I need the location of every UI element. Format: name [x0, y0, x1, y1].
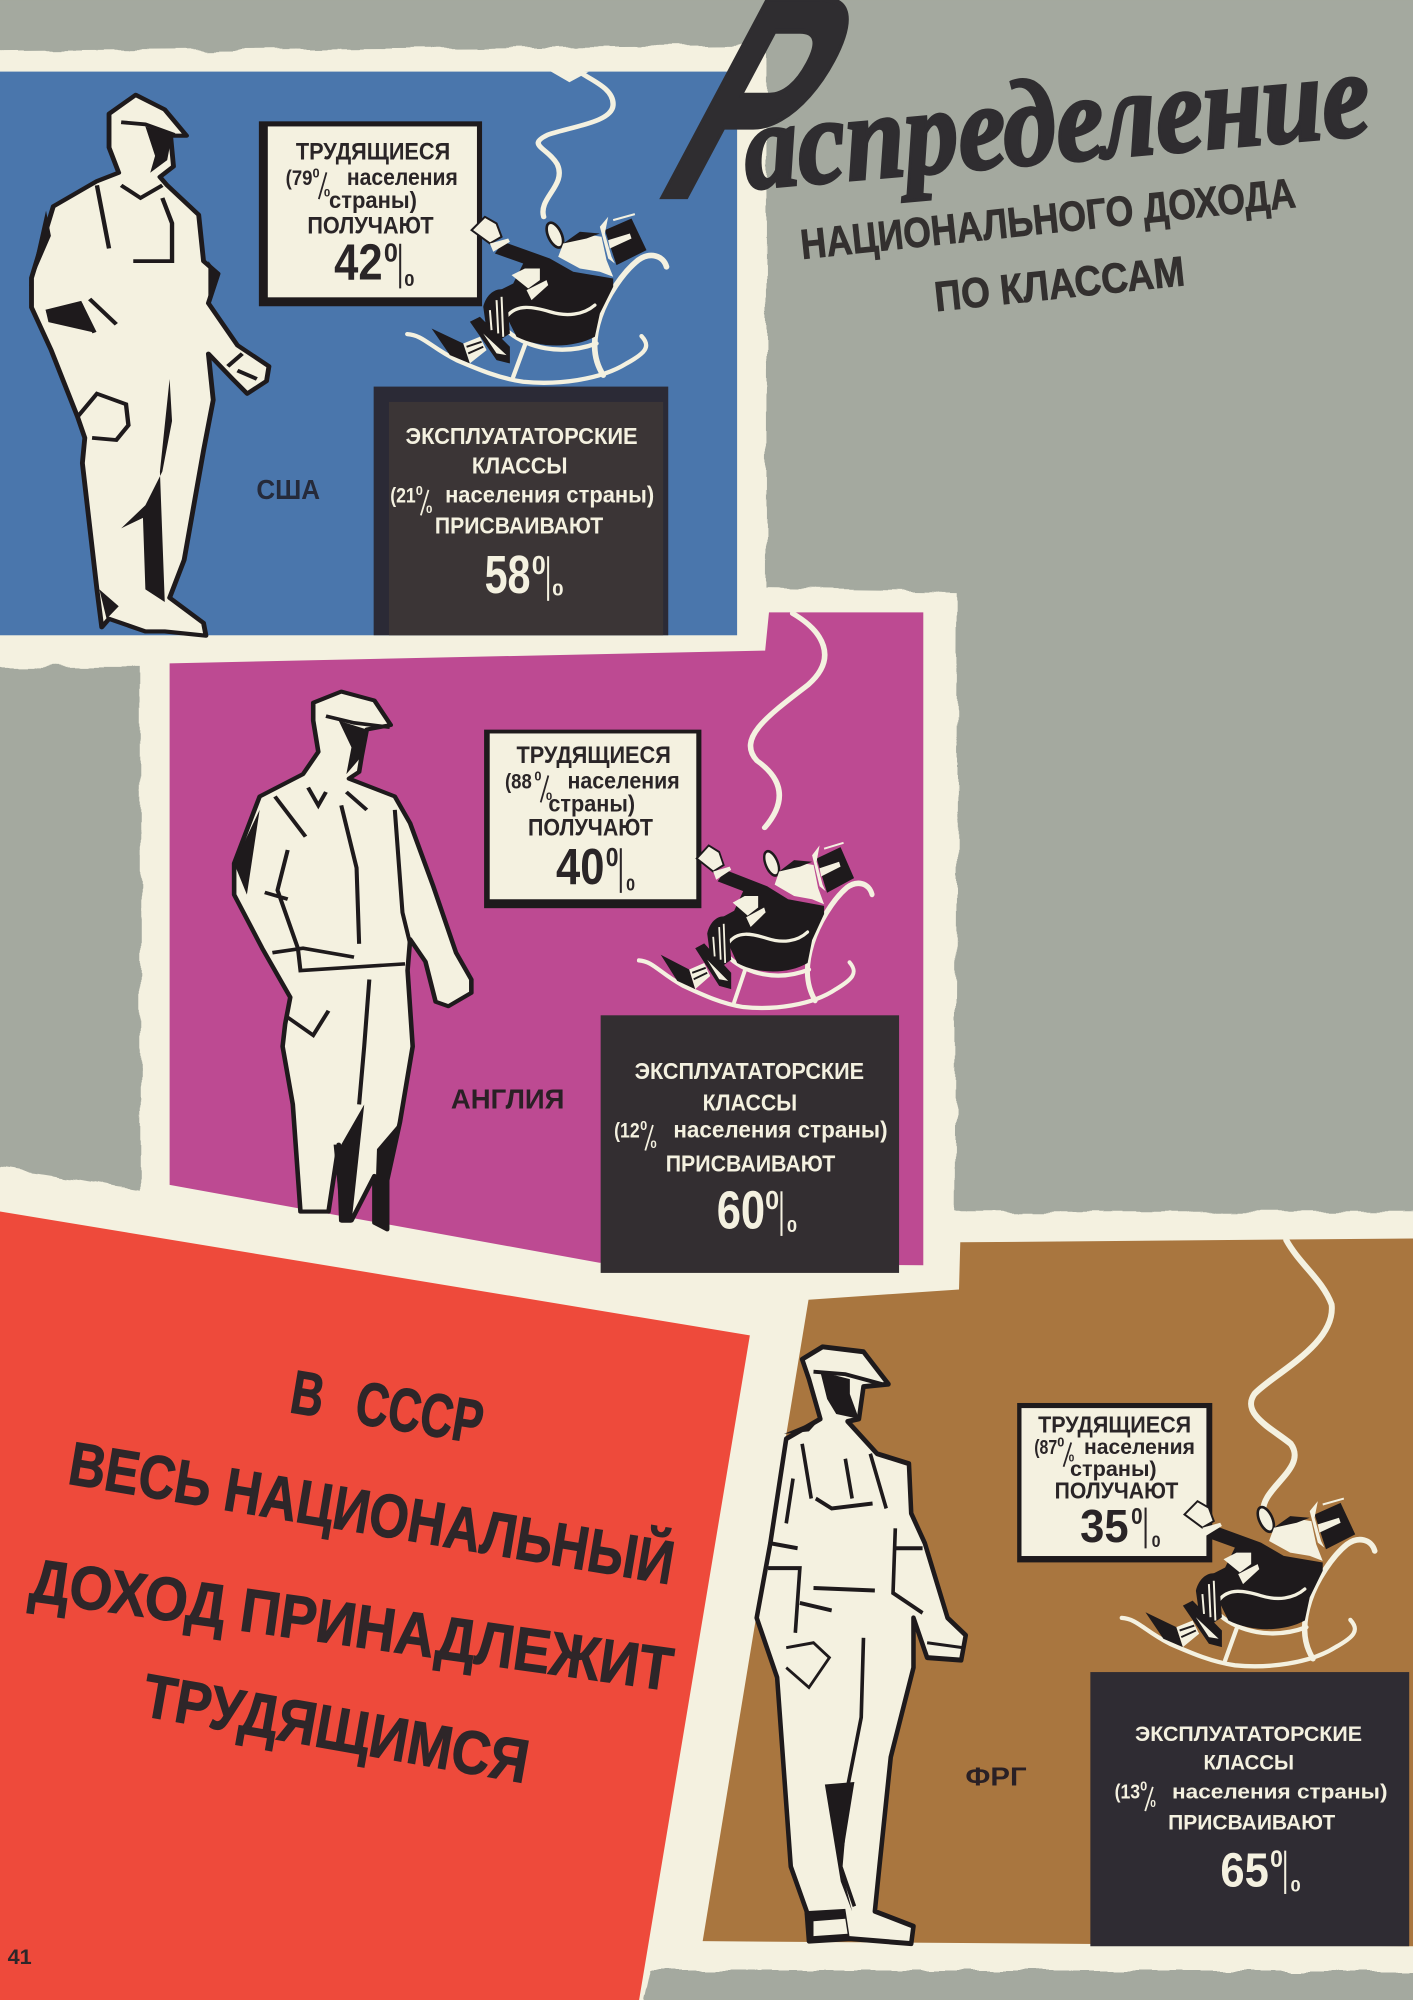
worker figure USA — [29, 95, 269, 636]
title: Распределение — [618, 0, 1375, 257]
sign: working people England: 0 — [606, 844, 619, 872]
country label England: АНГЛИЯ — [451, 1083, 564, 1114]
panel: USA — [0, 70, 737, 636]
sign: working people England: (88 — [505, 768, 532, 793]
black box: exploiters England: ПРИСВАИВАЮТ — [666, 1150, 835, 1176]
red background — [0, 1210, 750, 2000]
sign: working people FRG: (87 — [1034, 1437, 1057, 1459]
black box: exploiters USA: (21 — [390, 483, 416, 508]
blue background — [0, 72, 737, 635]
black box: exploiters FRG: КЛАССЫ — [1203, 1750, 1294, 1775]
statement text: ТРУДЯЩИМСЯ — [138, 1661, 534, 1796]
worker figure FRG — [757, 1347, 966, 1944]
black box: exploiters USA: ПРИСВАИВАЮТ — [435, 512, 603, 538]
black box: exploiters USA: населения страны) — [445, 482, 654, 508]
black box: exploiters USA: 0 — [426, 504, 432, 516]
sign: working people England: населения — [567, 767, 680, 793]
sign: working people FRG: 35 — [1080, 1500, 1129, 1552]
subtitle: ПО КЛАССАМ — [932, 247, 1187, 320]
black box: exploiters FRG: 0 — [1291, 1876, 1301, 1895]
black box: exploiters England: КЛАССЫ — [703, 1089, 797, 1115]
black box: exploiters FRG: населения страны) — [1172, 1781, 1387, 1803]
black box: exploiters USA: 0 — [416, 483, 423, 498]
smoke USA — [538, 70, 613, 217]
panel: FRG — [703, 1238, 1413, 1946]
sign: working people FRG: 0 — [1069, 1454, 1075, 1465]
sign: working people England: ПОЛУЧАЮТ — [528, 814, 653, 841]
pink background — [170, 612, 923, 1265]
sign: working people England — [484, 730, 701, 908]
sign: working people England: страны) — [548, 790, 635, 816]
worker figure England — [234, 692, 471, 1229]
sign: working people FRG: страны) — [1070, 1456, 1157, 1481]
black box: exploiters England: (12 — [614, 1118, 640, 1143]
page number: 41 — [8, 1944, 32, 1969]
subtitle: НАЦИОНАЛЬНОГО ДОХОДА — [798, 169, 1298, 268]
sign: working people USA: 42 — [334, 233, 383, 290]
sign: working people USA — [259, 121, 482, 306]
sign: working people England: ТРУДЯЩИЕСЯ — [516, 742, 671, 769]
black box: exploiters England: 0 — [650, 1139, 657, 1151]
panel: England — [170, 612, 923, 1273]
sign: working people FRG: 0 — [1057, 1434, 1064, 1449]
sign: working people USA: ПОЛУЧАЮТ — [307, 213, 434, 240]
black box: exploiters FRG: 0 — [1270, 1846, 1283, 1873]
sign: working people FRG: ПОЛУЧАЮТ — [1055, 1478, 1178, 1504]
sign: working people England: 0 — [546, 791, 552, 803]
sign: working people USA: населения — [347, 164, 458, 190]
black box: exploiters England: населения страны) — [673, 1117, 888, 1143]
black box: exploiters FRG: ПРИСВАИВАЮТ — [1168, 1810, 1335, 1835]
black box: exploiters England — [601, 1015, 899, 1273]
black box: exploiters England: 0 — [640, 1118, 647, 1133]
sign: working people USA: ТРУДЯЩИЕСЯ — [296, 139, 450, 166]
country label USA: США — [256, 474, 320, 505]
sign: working people England: 0 — [534, 769, 541, 784]
statement text: ДОХОД ПРИНАДЛЕЖИТ — [26, 1546, 677, 1704]
black box: exploiters USA: КЛАССЫ — [472, 452, 567, 478]
sign: working people FRG: ТРУДЯЩИЕСЯ — [1038, 1411, 1191, 1437]
capitalist in rocking chair USA — [407, 214, 667, 383]
capitalist in rocking chair FRG — [1122, 1499, 1375, 1666]
black box: exploiters FRG — [1090, 1672, 1409, 1946]
sign: working people FRG: 0 — [1152, 1532, 1160, 1551]
subtitle — [798, 169, 1298, 320]
black box: exploiters USA: ЭКСПЛУАТАТОРСКИЕ — [406, 423, 638, 449]
sign: working people England: 40 — [556, 838, 604, 895]
panel: USSR red statement — [0, 1210, 750, 2000]
black box: exploiters England: ЭКСПЛУАТАТОРСКИЕ — [635, 1058, 864, 1084]
black box: exploiters USA — [374, 387, 668, 635]
black box: exploiters USA: 58 — [485, 546, 531, 605]
black box: exploiters FRG: 0 — [1140, 1779, 1147, 1794]
black box: exploiters FRG: 0 — [1150, 1799, 1156, 1810]
black box: exploiters England: 60 — [717, 1181, 765, 1240]
statement text — [26, 1358, 679, 1796]
sign: working people USA: 0 — [404, 270, 415, 290]
black box: exploiters England: 0 — [765, 1187, 779, 1215]
brown background — [703, 1238, 1413, 1946]
black box: exploiters FRG: (13 — [1115, 1781, 1140, 1803]
black box: exploiters USA: 0 — [552, 580, 564, 600]
statement text: ВЕСЬ НАЦИОНАЛЬНЫЙ — [64, 1428, 679, 1597]
black box: exploiters USA: 0 — [532, 552, 546, 580]
smoke England — [751, 613, 825, 828]
sign: working people FRG: 0 — [1131, 1503, 1143, 1529]
sign: working people FRG: населения — [1084, 1434, 1195, 1459]
sign: working people FRG — [1017, 1403, 1212, 1562]
sign: working people USA: страны) — [329, 187, 417, 213]
black box: exploiters FRG: 65 — [1220, 1843, 1269, 1897]
capitalist in rocking chair England — [639, 843, 872, 1008]
country label FRG: ФРГ — [965, 1764, 1027, 1792]
sign: working people USA: 0 — [384, 240, 398, 268]
black box: exploiters England: 0 — [787, 1216, 797, 1236]
sign: working people USA: 0 — [312, 165, 320, 180]
sign: working people USA: 0 — [324, 188, 330, 200]
sign: working people England: 0 — [626, 874, 635, 894]
black box: exploiters FRG: ЭКСПЛУАТАТОРСКИЕ — [1135, 1721, 1362, 1746]
statement text: В СССР — [286, 1358, 488, 1457]
sign: working people USA: (79 — [286, 165, 312, 190]
smoke FRG — [1251, 1240, 1332, 1513]
